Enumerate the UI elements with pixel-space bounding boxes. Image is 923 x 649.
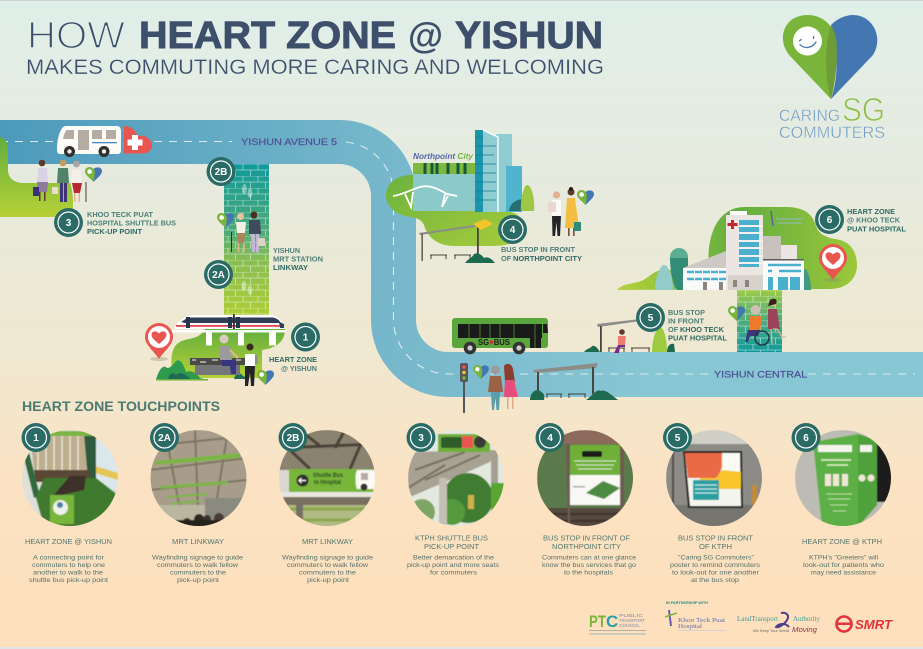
location 6: Heart Zone @ Khoo Teck Puat Hospital [617, 205, 906, 290]
caption title [543, 534, 631, 551]
badge 5 [636, 303, 665, 332]
caption description: Commuters can at one glance [542, 554, 636, 562]
caption title: PICK-UP POINT [424, 542, 480, 551]
caption title: KTPH SHUTTLE BUS [415, 534, 488, 542]
illustration: roadside shelter [530, 363, 618, 400]
logo: Public Transport Council: C [606, 612, 618, 631]
icon: heart pin [783, 15, 877, 99]
label 6: HEART ZONE [847, 207, 895, 216]
badge 2A: 2A [158, 433, 171, 444]
green hill [386, 175, 524, 246]
caption description: poster to remind commuters [670, 562, 761, 569]
icon: small heart pin [473, 365, 489, 379]
logo wordmark [779, 91, 885, 142]
badge 6 [815, 205, 844, 234]
icon: red location pin with heart [819, 244, 847, 282]
badge 2A [150, 423, 179, 452]
caption description: commuters to walk fellow [157, 562, 238, 569]
logo: Public Transport Council: PT [589, 612, 606, 631]
badge 3 [406, 423, 436, 452]
illustration: shuttle bus [57, 126, 121, 157]
icon: small heart pin [257, 370, 274, 385]
caption description [407, 554, 500, 576]
caption description: shuttle bus pick-up point [29, 577, 108, 584]
label 4 [501, 245, 582, 263]
illustration: hospital building [683, 211, 804, 290]
badge 1: 1 [33, 433, 39, 444]
caption description: may need assistance [811, 570, 876, 576]
caption description [670, 554, 761, 584]
badge 6 [792, 423, 820, 452]
logo: Land Transport Authority: LandTransport [737, 614, 779, 623]
illustration: commuters group [33, 160, 86, 202]
heading: Heart Zone touchpoints: HEART ZONE TOUCHPOINTS [22, 399, 220, 414]
badge 2B: 2B [287, 433, 299, 444]
caption description: commuters to walk fellow [287, 562, 368, 569]
badge 2A [204, 260, 233, 289]
logo: Caring SG Commuters [779, 15, 885, 142]
illustration: SG bus [452, 318, 548, 354]
logo: SMRT [836, 616, 893, 632]
caption description: pick-up point and more seats [407, 562, 500, 569]
mall name: Northpoint City [413, 152, 474, 161]
hospital logo on hill [771, 211, 804, 226]
logo: SMRT: SMRT [855, 618, 893, 632]
illustration: elderly woman and boy [219, 334, 258, 386]
partner logos [589, 601, 893, 635]
caption description: KTPH's "Greeters" will [809, 554, 879, 562]
badge 4: 4 [547, 433, 553, 444]
logo: Public Transport Council: COUNCIL [619, 623, 641, 628]
label 3: KHOO TECK PUAT [87, 210, 153, 219]
bridge arch [393, 186, 457, 207]
caption description: another to walk to the [33, 570, 103, 576]
label 1: HEART ZONE [269, 355, 317, 364]
badge 1 [22, 423, 50, 452]
label 2: MRT STATION [273, 254, 323, 264]
badge 5: 5 [675, 433, 681, 444]
badge 3 [54, 208, 83, 237]
label 5: IN FRONT [668, 316, 704, 326]
caption description: Wayfinding signage to guide [282, 554, 373, 562]
icon: small heart pin [577, 190, 594, 205]
plants [509, 199, 528, 211]
badge 1 [291, 322, 320, 352]
logo: Land Transport Authority [737, 613, 820, 634]
illustration: bus stop shelter [419, 219, 495, 263]
touchpoint 5 [663, 423, 763, 584]
illustration: wheelchair user and carer [745, 299, 786, 345]
caption description: look-out for patients who [803, 562, 884, 569]
illustration: shelter with seated commuter [584, 319, 675, 353]
location 1: Heart Zone @ Yishun [145, 314, 320, 386]
caption description: to the hospitals [564, 570, 614, 576]
mall sign strip [413, 163, 475, 174]
brick linkway [224, 164, 269, 316]
caption description: Better demarcation of the [413, 554, 494, 562]
label 6: @ KHOO TECK [847, 216, 901, 224]
brick wall [737, 290, 782, 352]
logo: Public Transport Council: PUBLIC [619, 613, 644, 618]
photo: Heart Zone seating area [22, 430, 120, 530]
caption description: "Caring SG Commuters" [678, 554, 755, 562]
badge 4 [536, 423, 564, 452]
photo: shuttle bus wayfinding sign: to Hospital [314, 479, 341, 486]
badge 4: 4 [510, 225, 516, 236]
title: HOW [27, 15, 125, 57]
partnership caption: IN PARTNERSHIP WITH [666, 601, 708, 605]
touchpoint 6 [792, 423, 892, 576]
label 2: LINKWAY [273, 263, 308, 272]
title: YISHUN [455, 15, 603, 57]
caption description: commuters to help one [32, 562, 105, 569]
label 5: BUS STOP [668, 308, 705, 317]
badge 2A: 2A [212, 270, 225, 281]
label 2: YISHUN [273, 246, 300, 255]
illustration: Northpoint City mall and towers [393, 130, 534, 212]
photo: shuttle bus wayfinding sign [279, 430, 376, 528]
label 1: @ YISHUN [281, 364, 317, 373]
touchpoint 2A [150, 423, 247, 584]
logo wordmark: SG [842, 91, 885, 128]
illustration: commuters on linkway [231, 212, 265, 252]
logo: Khoo Teck Puat Hospital: Khoo Teck Puat [678, 617, 725, 624]
photo: bus stop information panel [537, 430, 634, 527]
logo: Land Transport Authority: Moving [792, 627, 817, 634]
title: @ [408, 15, 443, 56]
badge 6: 6 [803, 433, 809, 444]
label 2 [273, 246, 323, 272]
label 3 [87, 210, 176, 236]
caption title: OF KTPH [699, 542, 732, 551]
caption title: NORTHPOINT CITY [552, 542, 621, 551]
label 4: BUS STOP IN FRONT [501, 245, 575, 254]
location 2: MRT station linkway [204, 157, 323, 316]
icon: small heart pin [728, 306, 745, 321]
badge 4 [498, 215, 527, 244]
badge 2B [278, 423, 308, 452]
illustration: man and woman commuters [548, 187, 581, 236]
label 5 [668, 308, 727, 342]
sign text: Shuttle Bus [313, 472, 343, 479]
caption description [282, 554, 373, 584]
caption title: HEART ZONE @ KTPH [802, 537, 882, 546]
logo: Land Transport Authority: We Keep Your World [753, 628, 789, 633]
location 5: bus stop in front of KTPH [452, 290, 786, 413]
logo wordmark: CARING [779, 106, 840, 125]
logo: Khoo Teck Puat Hospital [665, 610, 725, 631]
photo: Heart Zone pillar at KTPH [795, 430, 892, 527]
illustration: stone bench [190, 358, 245, 375]
title: MAKES COMMUTING MORE CARING AND WELCOMING [26, 56, 604, 79]
badge 5 [663, 423, 692, 452]
label 1 [269, 355, 317, 373]
caption title: MRT LINKWAY [172, 537, 224, 546]
touchpoint 4 [536, 423, 636, 576]
badge 6: 6 [827, 215, 833, 226]
illustration: plants [156, 360, 250, 380]
caption description [152, 554, 243, 584]
illustration: SG bus: SG♥BUS [478, 338, 511, 347]
touchpoint 2B [278, 423, 376, 584]
touchpoint 3 [406, 423, 505, 576]
icon: red heart with cross [124, 126, 152, 154]
green hill [617, 207, 857, 290]
caption title: BUS STOP IN FRONT [678, 534, 754, 542]
road label: Yishun Avenue 5: YISHUN AVENUE 5 [241, 137, 337, 147]
logo wordmark: COMMUTERS [779, 123, 885, 142]
icon: red location pin with heart [145, 323, 173, 361]
label 3: HOSPITAL SHUTTLE BUS [87, 218, 176, 228]
caption description [29, 554, 108, 584]
caption title: HEART ZONE @ YISHUN [25, 537, 112, 546]
label 6: PUAT HOSPITAL [847, 224, 906, 234]
label 5: OF [668, 325, 679, 334]
badge 3: 3 [418, 433, 424, 444]
logo: Khoo Teck Puat Hospital: Hospital [678, 623, 702, 630]
caption description: Wayfinding signage to guide [152, 554, 243, 562]
road label: Yishun Central: YISHUN CENTRAL [714, 370, 807, 380]
title: HEART ZONE [139, 15, 396, 57]
photo: KTPH shuttle bus shelter [408, 430, 505, 528]
illustration: MRT train [172, 314, 285, 346]
photo: MRT linkway ceiling with signs [150, 430, 247, 528]
logo: Public Transport Council [589, 612, 646, 635]
logo: Public Transport Council: TRANSPORT [619, 618, 645, 623]
badge 1: 1 [303, 332, 309, 344]
caption title: MRT LINKWAY [302, 537, 353, 546]
label 6 [847, 207, 906, 234]
badge 5: 5 [648, 313, 654, 324]
badge 2B: 2B [215, 167, 227, 178]
green hill [0, 137, 73, 217]
caption description: to look-out for one another [672, 570, 760, 576]
illustration: two commuters from behind [488, 364, 518, 410]
label 3: PICK-UP POINT [87, 227, 142, 236]
label 4: NORTHPOINT CITY [513, 254, 582, 263]
green blob [171, 329, 285, 378]
icon: small heart pin [85, 167, 102, 182]
location 4: bus stop in front of Northpoint City [386, 130, 594, 263]
label 5: KHOO TECK [680, 325, 725, 334]
touchpoint 1 [22, 423, 120, 584]
caption description: pick-up point [177, 577, 219, 584]
title [26, 15, 604, 79]
caption description: commuters to the [170, 570, 226, 576]
label 4: OF [501, 254, 512, 263]
badge 2B [206, 157, 236, 186]
caption title [678, 534, 754, 551]
caption title: BUS STOP IN FRONT OF [543, 534, 631, 542]
caption description: commuters to the [299, 570, 356, 576]
label 5: PUAT HOSPITAL [668, 334, 727, 342]
caption title [415, 534, 488, 551]
road [0, 120, 923, 397]
badge 3: 3 [66, 218, 72, 229]
caption description [542, 554, 636, 576]
location 3: shuttle bus pick-up point [0, 126, 176, 237]
caption description: at the bus stop [691, 577, 739, 584]
caption description: know the bus services that go [542, 562, 636, 569]
caption description: A connecting point for [33, 554, 105, 562]
illustration: traffic light [460, 363, 468, 413]
illustration: trees [655, 248, 811, 290]
photo: Caring SG Commuters poster [666, 430, 763, 527]
icon: footprints [242, 184, 252, 295]
caption description: for commuters [430, 570, 478, 576]
logo: Land Transport Authority: Authority [793, 614, 820, 623]
icon: small heart pin [217, 213, 234, 228]
caption description [803, 554, 884, 576]
caption description: pick-up point [307, 577, 349, 584]
